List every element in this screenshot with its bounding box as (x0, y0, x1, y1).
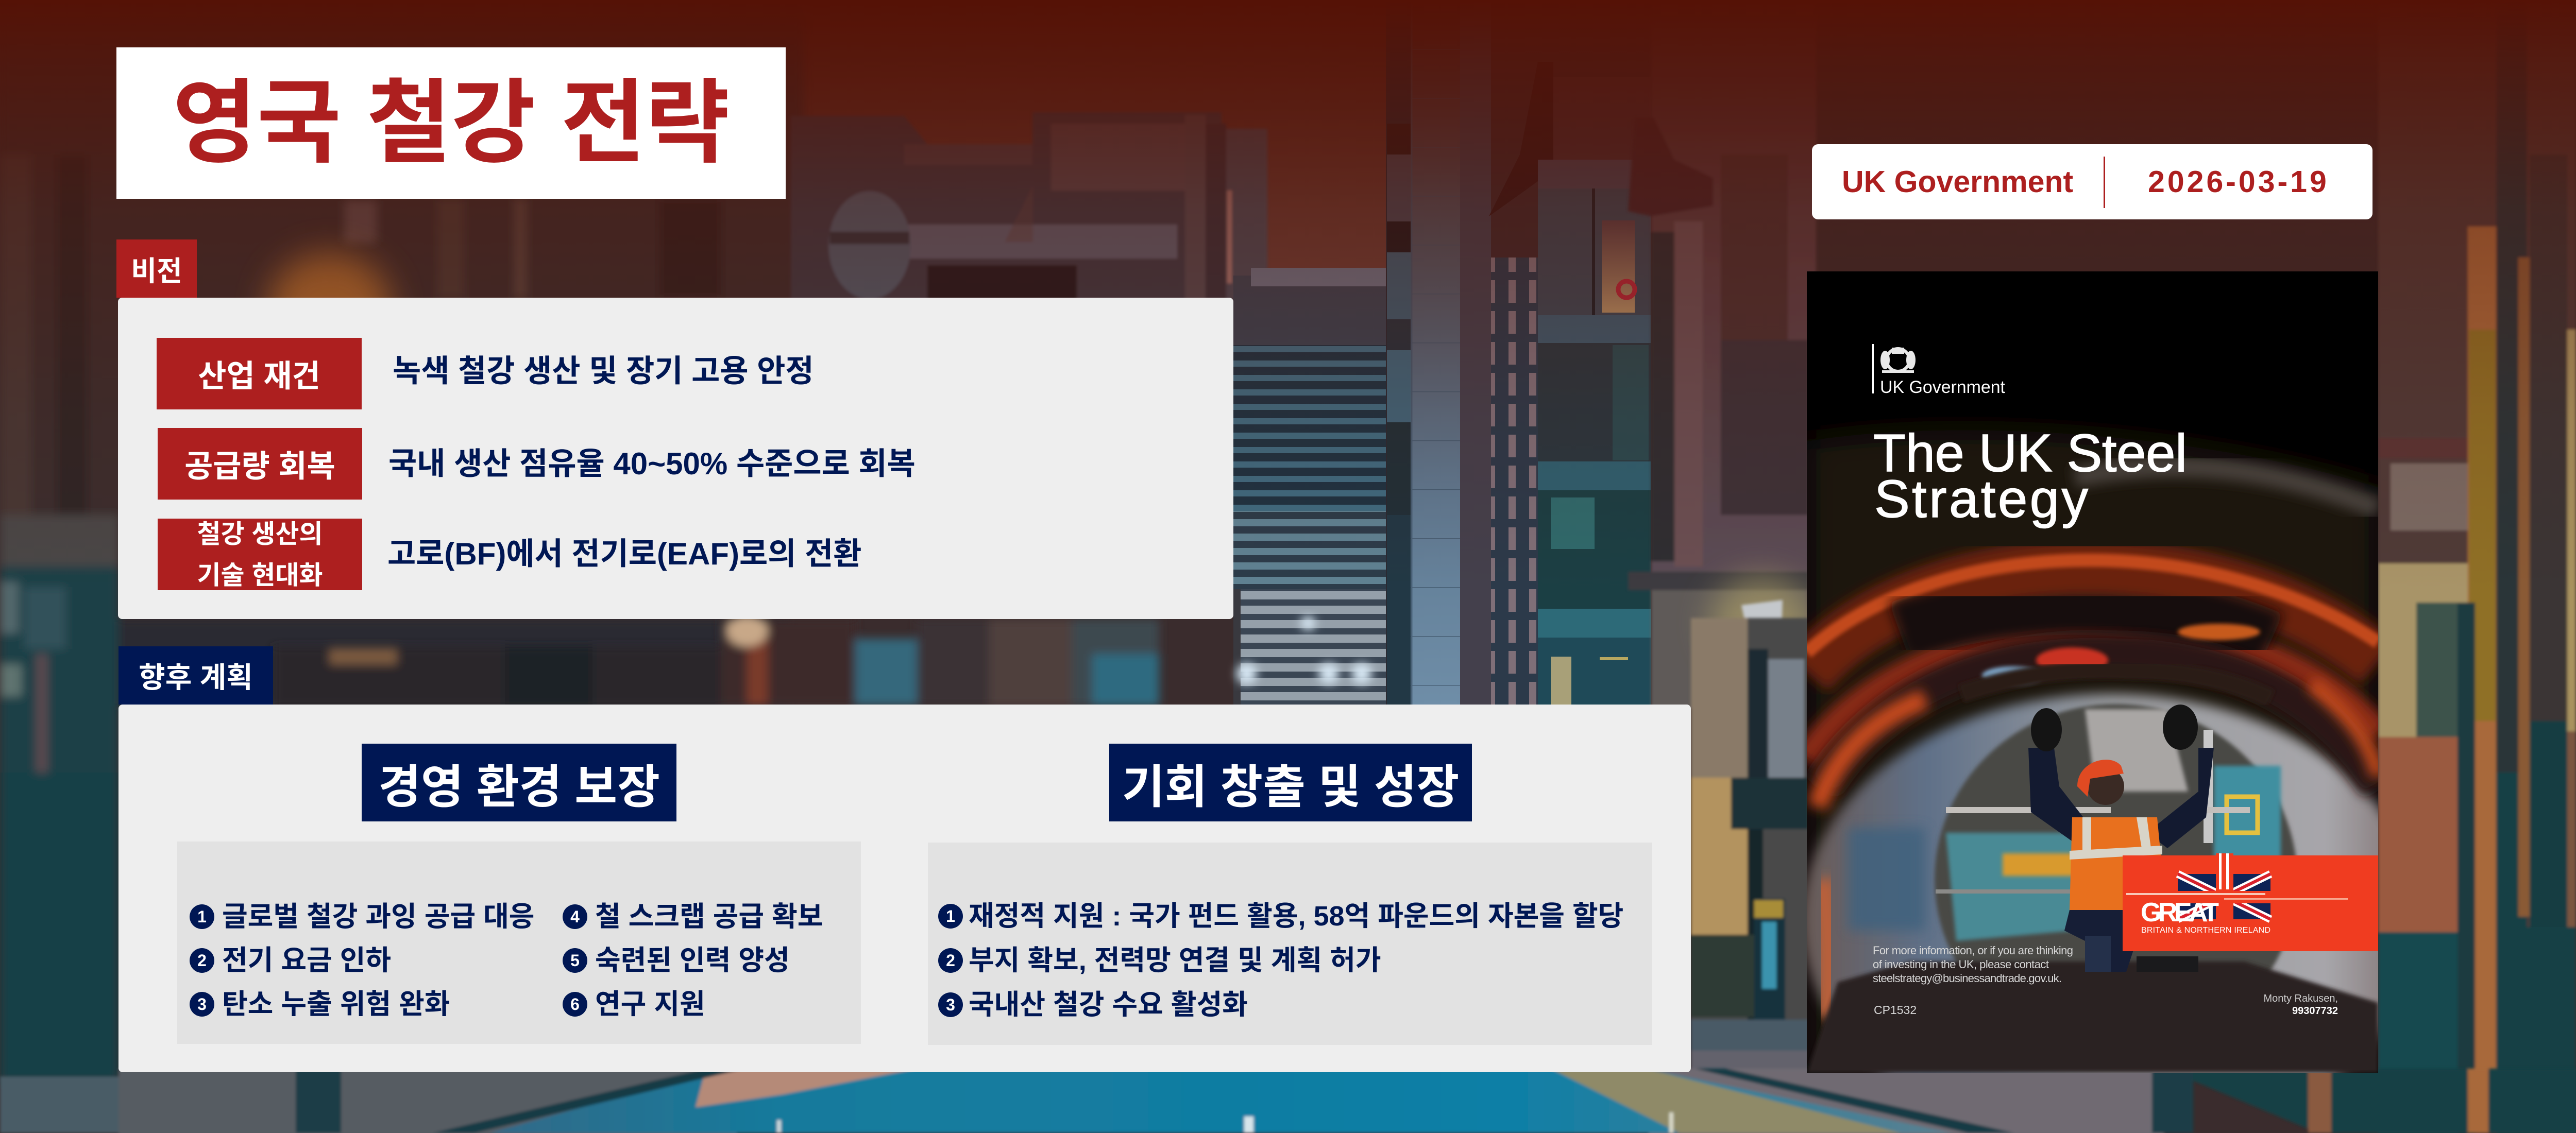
vision row 3 label (158, 519, 362, 590)
background: tall pillar (1386, 0, 1463, 708)
cover title: Strategy (1874, 469, 2089, 528)
item 2: 2 (197, 951, 207, 970)
icon: royal crest (1880, 348, 1916, 373)
item 2: 2 (946, 951, 955, 970)
GREAT campaign badge (2123, 853, 2378, 951)
item 6: 6 (570, 995, 580, 1014)
date label: 2026-03-19 (2148, 165, 2329, 199)
cover title (1873, 423, 2187, 528)
GREAT wordmark: GREAT (2141, 898, 2219, 928)
future plan tag: 향후 계획 (139, 661, 253, 694)
item 4: 철 스크랩 공급 확보 (595, 901, 823, 932)
UK Government logo (1872, 344, 2006, 397)
heading: business environment (362, 744, 676, 821)
item 1: 1 (197, 907, 207, 926)
panel: future plan (118, 705, 1691, 1072)
cover reference code: CP1532 (1874, 1003, 1917, 1017)
item 1: 1 (946, 907, 955, 925)
vision row 2 label: 공급량 회복 (184, 449, 335, 484)
background: glow behind vision panel (268, 252, 392, 366)
heading: opportunity and growth (1109, 744, 1472, 821)
vision row 3 text: 고로(BF)에서 전기로(EAF)로의 전환 (387, 537, 861, 571)
future plan tag (118, 646, 273, 705)
vision row 1 text: 녹색 철강 생산 및 장기 고용 안정 (393, 354, 814, 388)
item 3: 3 (946, 995, 955, 1014)
title (116, 47, 786, 199)
photo credit (2263, 993, 2338, 1017)
source and date chip (1812, 144, 2372, 219)
vision tag (116, 239, 197, 298)
cover image: worker (2028, 705, 2214, 972)
heading: opportunity and growth: 기회 창출 및 성장 (1122, 761, 1459, 813)
photo credit: Monty Rakusen, (2263, 993, 2338, 1004)
vision row 1 label (157, 338, 362, 409)
vision row 2 text: 국내 생산 점유율 40~50% 수준으로 회복 (388, 447, 916, 481)
cover image: motion-blurred steel ring (1807, 421, 2378, 1073)
item 2: 전기 요금 인하 (222, 945, 391, 976)
vision row 3 label: 기술 현대화 (197, 560, 323, 589)
heading: business environment: 경영 환경 보장 (378, 761, 660, 813)
background: red tint overlay (0, 0, 2576, 592)
cover contact note: For more information, or if you are thinking (1873, 944, 2073, 957)
item 1: 재정적 지원 : 국가 펀드 활용, 58억 파운드의 자본을 할당 (969, 901, 1623, 932)
background: sky (721, 0, 1401, 319)
item 3: 탄소 누출 위험 완화 (222, 989, 450, 1020)
report cover: The UK Steel Strategy (1807, 271, 2378, 1073)
cover image: factory interior (1932, 701, 2298, 971)
title: 영국 철강 전략 (173, 72, 730, 174)
background: right side building (2378, 0, 2576, 1133)
logo wordmark: UK Government (1880, 377, 2006, 397)
background: lower street strip (273, 615, 1159, 708)
list box right (928, 843, 1652, 1045)
vision row 3 label: 철강 생산의 (197, 519, 323, 548)
icon: Union flag (2126, 853, 2348, 923)
background: stone building (1628, 0, 1816, 709)
item 4: 4 (570, 907, 580, 926)
vision row 2 label (158, 428, 362, 500)
cover contact note: steelstrategy@businessandtrade.gov.uk. (1873, 972, 2062, 985)
cover title: The UK Steel (1873, 423, 2187, 483)
background: street lights (1236, 616, 1372, 684)
background: modern glass building (1233, 268, 1390, 708)
background: mid building and glass tower (1460, 0, 1661, 710)
cover contact note: of investing in the UK, please contact (1873, 958, 2049, 971)
item 3: 국내산 철강 수요 활성화 (969, 989, 1248, 1020)
list box left (177, 842, 861, 1044)
photo credit: 99307732 (2292, 1005, 2338, 1017)
background: street lamp (1710, 577, 1814, 670)
item 3: 3 (197, 995, 207, 1014)
item 3 (938, 987, 1350, 1023)
item 1: 글로벌 철강 과잉 공급 대응 (222, 901, 535, 932)
cover contact note (1873, 944, 2073, 985)
vision row 1 label: 산업 재건 (198, 359, 320, 393)
item 2: 부지 확보, 전력망 연결 및 계획 허가 (969, 945, 1381, 976)
background: right of panel, shopfront and parking machine (1691, 618, 1809, 1082)
item 5: 5 (570, 951, 580, 970)
background: distant modern blocks (791, 112, 1267, 309)
item 6: 연구 지원 (595, 989, 705, 1020)
background: left buildings (0, 0, 804, 1082)
panel: vision (118, 298, 1233, 619)
item 2 (938, 942, 1453, 978)
source label: UK Government (1842, 165, 2073, 199)
badge subtitle: BRITAIN & NORTHERN IRELAND (2141, 926, 2270, 935)
vision tag: 비전 (131, 256, 182, 287)
item 5: 숙련된 인력 양성 (595, 945, 790, 976)
background: road and pavements (0, 1069, 2576, 1133)
cover image: floor (1807, 962, 2378, 1073)
